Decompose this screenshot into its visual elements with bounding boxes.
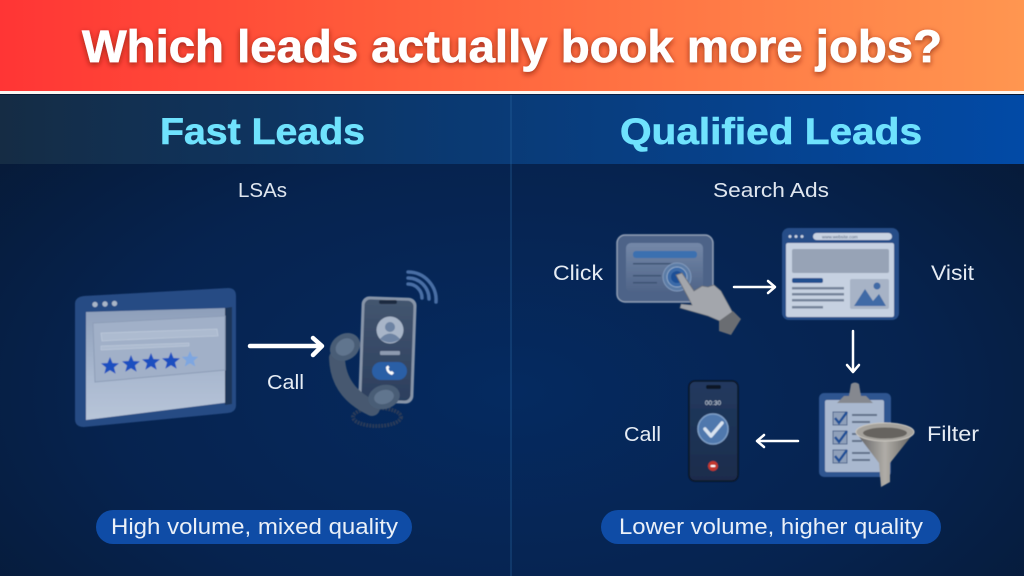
pill: high volume, mixed quality xyxy=(96,510,412,544)
heading: fast leads: Fast Leads xyxy=(160,111,365,152)
arrow: click to visit xyxy=(734,281,775,293)
icon: website page xyxy=(782,228,899,320)
title: Which leads actually book more jobs? xyxy=(82,21,942,72)
label: filter: Filter xyxy=(927,423,979,446)
label: call (search ads): Call xyxy=(624,424,661,446)
icon: phone with confirmed call xyxy=(689,381,738,481)
icon: telephone handset xyxy=(324,327,403,413)
rating stars xyxy=(101,351,198,374)
icon: clipboard checklist with funnel xyxy=(819,382,914,487)
checklist rows xyxy=(833,412,877,463)
subheading: Search Ads: Search Ads xyxy=(713,180,829,202)
icon: signal waves xyxy=(408,272,436,302)
arrow: filter to call xyxy=(757,435,798,447)
icon: tablet with tapping hand xyxy=(617,235,741,335)
icon: phone with confirmed call: 00:30 xyxy=(705,400,722,407)
label: call: Call xyxy=(267,372,304,394)
subheading: LSAs: LSAs xyxy=(238,180,287,202)
icon: pointing hand xyxy=(676,273,741,335)
icon: telephone cord xyxy=(353,408,401,426)
icon: review browser window with stars xyxy=(75,288,236,427)
arrow: reviews to call xyxy=(250,338,322,355)
pill: lower volume, higher quality: Lower volume, higher quality xyxy=(619,514,923,539)
label: click: Click xyxy=(553,262,604,285)
heading: qualified leads: Qualified Leads xyxy=(620,111,922,152)
pill: lower volume, higher quality xyxy=(601,510,941,544)
arrow: visit to filter xyxy=(847,331,859,372)
pill: high volume, mixed quality: High volume, mixed quality xyxy=(111,514,398,539)
icon: smartphone with handset xyxy=(324,272,436,426)
header banner xyxy=(0,0,1024,94)
column heading band xyxy=(0,95,1024,164)
icon: website page: www.website.com xyxy=(822,234,858,240)
label: visit: Visit xyxy=(931,262,974,285)
icon: metal funnel xyxy=(856,423,914,487)
